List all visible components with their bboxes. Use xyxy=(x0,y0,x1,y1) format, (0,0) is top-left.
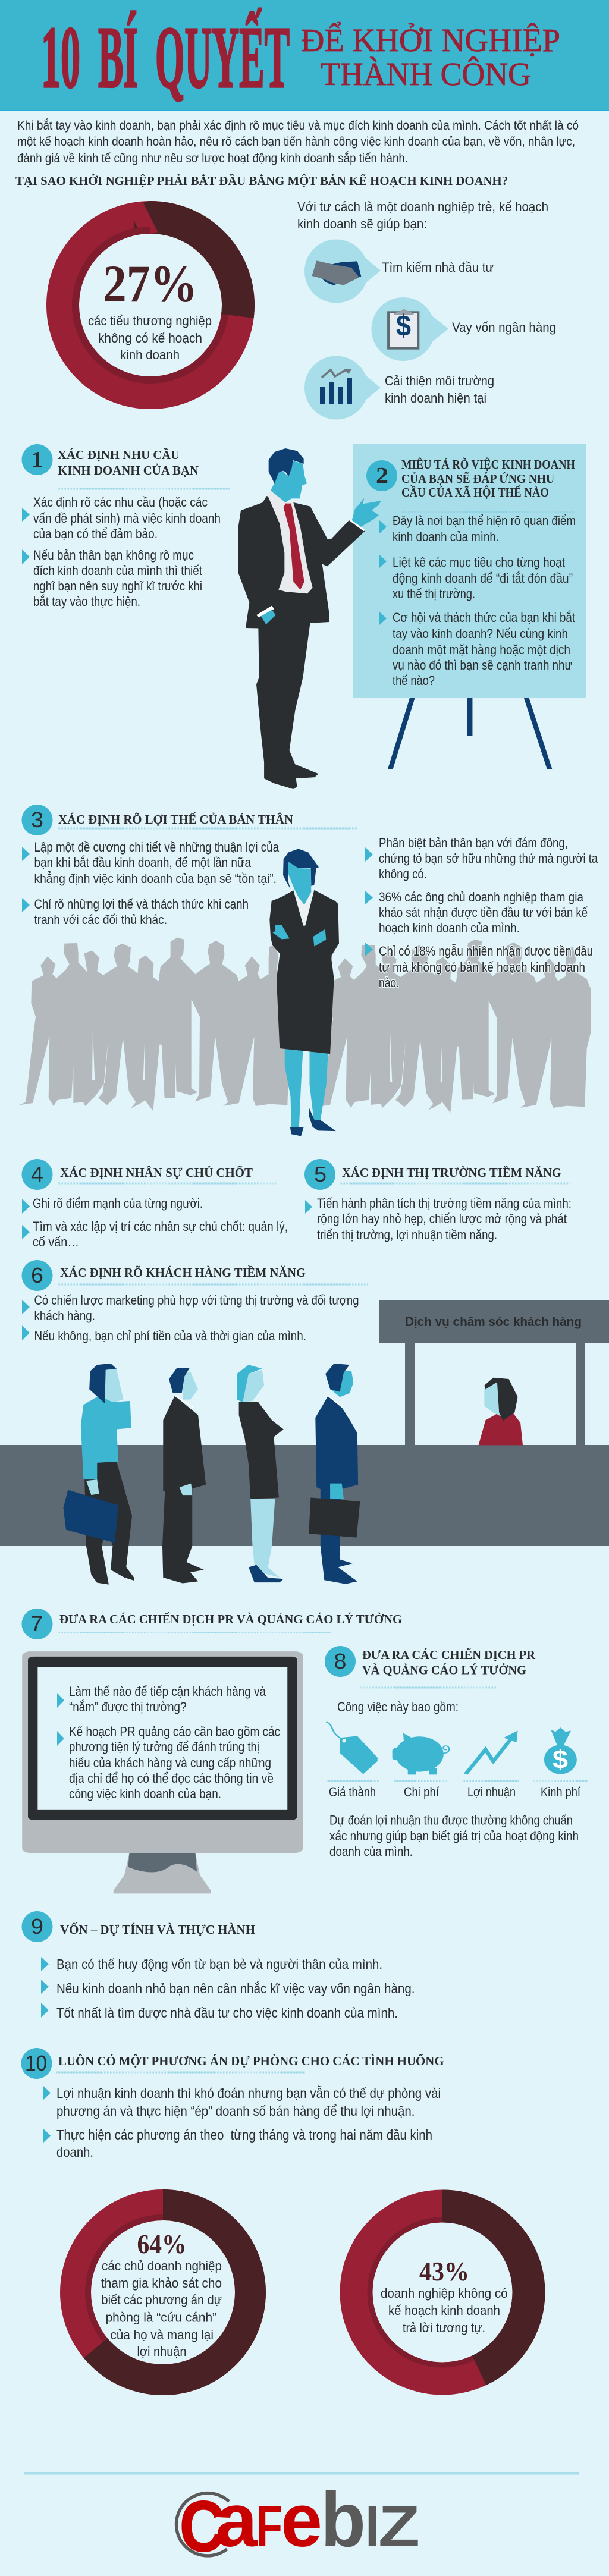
screen bullet 2: Kế hoạch PR quảng cáo cần bao gồm các xyxy=(69,1724,280,1739)
bullet text: rộng lớn hay nhỏ hẹp, chiến lược mở rộng và phát xyxy=(317,1211,567,1226)
logo red letters xyxy=(180,2478,322,2566)
bullet text 1: Phân biệt bản thân bạn với đám đông, xyxy=(379,835,568,850)
section 4 xyxy=(21,1159,288,1249)
donut caption xyxy=(88,313,212,362)
easel legs xyxy=(390,698,550,769)
heading: CỦA BẠN SẼ ĐÁP ỨNG NHU xyxy=(401,472,554,486)
bullet text 2: Chỉ rõ những lợi thế và thách thức khi cạnh xyxy=(34,897,249,912)
hair xyxy=(269,448,304,483)
bullet text 2: cố vấn… xyxy=(33,1234,79,1249)
bullet text 2: hoạch kinh doanh của mình. xyxy=(379,921,520,935)
label: Vay vốn ngân hàng xyxy=(452,320,556,335)
bullet text 1: Bạn có thể huy động vốn từ bạn bè và người thân của mình. xyxy=(56,1956,382,1972)
screen bullet 2: địa chỉ để họ có thể đọc các thông tin về xyxy=(69,1771,274,1786)
benefit: bank loan xyxy=(371,297,556,361)
icon labels: Lợi nhuận xyxy=(467,1785,516,1799)
floor xyxy=(0,1445,609,1546)
number badge 7: 7 xyxy=(30,1611,43,1636)
footer rule xyxy=(24,2472,579,2475)
bullet text 2: đích kinh doanh của mình thì thiết xyxy=(33,563,202,578)
section 5 xyxy=(304,1159,572,1242)
section 6 xyxy=(21,1260,368,1343)
donut caption: không có kế hoạch xyxy=(98,331,202,345)
heading: ĐƯA RA CÁC CHIẾN DỊCH PR xyxy=(362,1648,536,1662)
donut caption: tham gia khảo sát cho xyxy=(101,2276,222,2291)
stand xyxy=(114,1853,211,1893)
shirt xyxy=(294,889,312,926)
bullet text 1 xyxy=(379,513,576,544)
face xyxy=(288,862,311,905)
label: Cải thiện môi trường xyxy=(385,373,494,388)
speech bubble xyxy=(304,356,381,420)
header banner xyxy=(0,0,609,111)
bullet text 1: phương án và thực hiện “ép” doanh số bán hàng để thu lợi nhuận. xyxy=(56,2103,415,2119)
donut caption: kinh doanh xyxy=(120,347,180,362)
casing xyxy=(22,1651,303,1853)
crowd silhouette: right group xyxy=(316,940,591,1113)
heading: why a business plan: TẠI SAO KHỞI NGHIỆP PHẢI BẮT ĐẦU BẰNG MỘT BẢN KẾ HOẠCH KINH DOANH? xyxy=(15,174,508,188)
donut value: 43% xyxy=(419,2257,469,2286)
bullet text 3: vụ nào đó thì bạn sẽ cạnh tranh như xyxy=(393,658,572,673)
hair xyxy=(283,849,319,889)
logo red letters: a xyxy=(215,2478,258,2562)
heading xyxy=(401,457,575,500)
section 4: XÁC ĐỊNH NHÂN SỰ CHỦ CHỐT xyxy=(60,1166,253,1180)
bullet text 1 xyxy=(22,495,221,541)
heading xyxy=(362,1648,536,1677)
bullet text 2: Nếu không, bạn chỉ phí tiền của và thời gian của mình. xyxy=(34,1328,306,1343)
donut caption: phòng là “cứu cánh” xyxy=(106,2310,216,2325)
donut caption: kế hoạch kinh doanh xyxy=(388,2303,500,2318)
label: Tìm kiếm nhà đầu tư xyxy=(382,260,494,275)
section 7 heading: ĐƯA RA CÁC CHIẾN DỊCH PR VÀ QUẢNG CÁO LÝ TƯỞNG xyxy=(59,1612,402,1626)
screen bullet 2: công việc kinh doanh của bạn. xyxy=(69,1786,221,1801)
bullet text 1: vấn đề phát sinh) mà việc kinh doanh xyxy=(33,511,221,526)
donut chart: 27% xyxy=(63,218,238,392)
title: 10 bí quyết: 10 xyxy=(41,9,80,106)
benefits intro text: Với tư cách là một doanh nghiệp trẻ, kế hoạch xyxy=(297,199,548,214)
logo red letters: F xyxy=(256,2493,282,2559)
number badge 2 xyxy=(366,460,397,491)
hand xyxy=(352,498,381,527)
number badge 2: 2 xyxy=(376,463,388,488)
screen bullet 1: “nắm” được thị trường? xyxy=(69,1699,187,1714)
subtitle: ĐỂ KHỞI NGHIỆP xyxy=(301,21,560,58)
logo ring xyxy=(176,2493,229,2556)
jacket xyxy=(269,890,339,967)
shirt xyxy=(267,491,313,593)
logo red letters: C xyxy=(180,2487,225,2566)
bullet text 1: khách hàng. xyxy=(34,1308,95,1323)
logo grey letters: Z xyxy=(378,2493,420,2559)
icon labels: Giá thành xyxy=(329,1785,376,1799)
bullet text 1: kinh doanh của mình. xyxy=(393,529,499,544)
clerk xyxy=(479,1378,523,1445)
benefit: find investors xyxy=(304,239,494,303)
screen bullet 2: phương tiện lý tưởng để đánh trúng thị xyxy=(69,1739,259,1754)
donut chart: 64% xyxy=(76,2205,250,2380)
bullet text 2: bắt tay vào thực hiện. xyxy=(33,594,140,609)
donut value: 27% xyxy=(103,255,197,313)
bullet text 2: tranh với các đối thủ khác. xyxy=(34,912,167,927)
skirt xyxy=(277,941,334,1054)
bullet text 2 xyxy=(22,548,202,609)
closing paragraph: doanh của mình. xyxy=(329,1844,413,1859)
section 7 heading xyxy=(21,1609,402,1639)
bullet text 2 xyxy=(379,554,573,601)
hands xyxy=(272,925,290,939)
intro paragraph: đánh giá về kinh tế cũng như nêu sơ lược hoạt động kinh doanh sắp tiến hành. xyxy=(17,152,408,165)
donut caption: lợi nhuận xyxy=(137,2344,187,2359)
screen bullet 2: hiếu của khách hàng và cung cấp những xyxy=(69,1755,271,1770)
customer 4: man with briefcase xyxy=(309,1364,360,1584)
figure: businessman presenting xyxy=(238,448,381,789)
icon: piggy bank xyxy=(393,1733,449,1774)
bullet text 1: Lợi nhuận kinh doanh thì khó đoán nhưng bạn vẫn có thể dự phòng vài xyxy=(56,2085,441,2101)
number badge 4 xyxy=(21,1159,52,1190)
icon labels xyxy=(329,1785,580,1799)
number badge 6: 6 xyxy=(31,1263,43,1287)
section 9: VỐN – DỰ TÍNH VÀ THỰC HÀNH xyxy=(60,1922,255,1937)
donut caption: doanh nghiệp không có xyxy=(381,2286,508,2301)
bullet text 3: nào. xyxy=(379,975,399,990)
donut caption: trả lời tương tự. xyxy=(403,2320,485,2335)
section 3 right text xyxy=(365,835,598,990)
trousers xyxy=(256,616,319,789)
icon: clipboard: $ xyxy=(396,309,411,343)
bullet text 3 xyxy=(365,943,593,990)
bullet text 3 xyxy=(379,610,575,688)
bullet text 2: nghĩ bạn nên suy nghĩ kĩ trước khi xyxy=(33,579,202,593)
pocket with phone xyxy=(256,606,276,624)
number badge 3 xyxy=(21,805,52,835)
speech bubble xyxy=(371,297,448,361)
section 3 heading: XÁC ĐỊNH RÕ LỢI THẾ CỦA BẢN THÂN xyxy=(58,812,293,827)
booth xyxy=(379,1300,609,1445)
label: kinh doanh hiện tại xyxy=(385,391,486,406)
bullet text 3: doanh một mặt hàng hoặc một dịch xyxy=(393,642,570,657)
bullet text 1: bạn khi bắt đầu kinh doanh, để một lần nữa xyxy=(34,855,252,870)
bullet text 2: Thực hiện các phương án theo từng tháng và trong hai năm đầu kinh xyxy=(56,2127,432,2143)
donut chart: 43% xyxy=(356,2206,529,2379)
donut value: 64% xyxy=(137,2229,187,2259)
screen bullet 1 xyxy=(57,1684,266,1714)
number badge 5: 5 xyxy=(314,1162,327,1186)
board xyxy=(353,444,586,698)
screen bullet 2 xyxy=(57,1724,280,1801)
bullet text 2: động kinh doanh để “đi tắt đón đầu” xyxy=(393,571,573,586)
title: 10 bí quyết: BÍ xyxy=(98,9,138,106)
section 10 xyxy=(21,2048,444,2160)
number badge 9: 9 xyxy=(31,1914,43,1939)
bullet text 3: Tốt nhất là tìm được nhà đầu tư cho việc kinh doanh của mình. xyxy=(56,2005,398,2021)
face xyxy=(271,461,307,502)
bullet text 1: khẳng định việc kinh doanh của bạn sẽ “tồn tại”. xyxy=(34,871,277,886)
bullet text 3: tay vào kinh doanh? Nếu cùng kinh xyxy=(393,626,568,641)
subtitle: THÀNH CÔNG xyxy=(321,56,531,92)
icon labels: Kinh phí xyxy=(541,1785,580,1799)
crowd silhouette: left group xyxy=(19,938,293,1111)
bullet text 1: Lập một đề cương chi tiết về những thuận lợi của xyxy=(34,840,280,855)
number badge 3: 3 xyxy=(31,808,43,832)
section 10: LUÔN CÓ MỘT PHƯƠNG ÁN DỰ PHÒNG CHO CÁC TÌNH HUỐNG xyxy=(58,2054,444,2068)
benefit: improve business environment xyxy=(304,356,494,420)
customer service scene xyxy=(0,1300,609,1585)
section 9 xyxy=(21,1911,415,2021)
bullet text 1 xyxy=(22,1293,359,1323)
bullet text 1 xyxy=(365,835,598,881)
shoes xyxy=(290,1127,304,1136)
logo red letters: e xyxy=(281,2478,322,2562)
header banner: QUYẾT xyxy=(155,8,290,106)
number badge 1 xyxy=(21,444,52,475)
heading: MIÊU TẢ RÕ VIỆC KINH DOANH xyxy=(401,457,575,472)
bullet text 3: thế nào? xyxy=(393,673,435,688)
money bag dollar sign: $ xyxy=(553,1745,568,1774)
donut caption: của họ và mang lại xyxy=(111,2327,214,2342)
section 1 xyxy=(21,444,230,609)
benefits intro text xyxy=(297,199,548,231)
legs xyxy=(285,1048,303,1127)
speech bubble xyxy=(304,239,381,303)
title: 10 bí quyết xyxy=(41,8,290,106)
donut caption: các chủ doanh nghiệp xyxy=(102,2258,222,2273)
bullet text 2 xyxy=(43,2127,432,2160)
section 5: XÁC ĐỊNH THỊ TRƯỜNG TIỀM NĂNG xyxy=(342,1166,561,1180)
number badge 1: 1 xyxy=(32,447,43,472)
bullet text 2 xyxy=(22,897,249,927)
bullet text xyxy=(305,1196,572,1242)
icon: bar chart xyxy=(320,369,352,404)
bullet text 2 xyxy=(22,1219,288,1249)
bullet text 1: không có. xyxy=(379,866,427,881)
screen bullet 1: Làm thế nào để tiếp cận khách hàng và xyxy=(69,1684,266,1699)
bullet text 1: Xác định rõ các nhu cầu (hoặc các xyxy=(33,495,208,510)
number badge 10: 10 xyxy=(25,2051,47,2075)
heading: VÀ QUẢNG CÁO LÝ TƯỞNG xyxy=(362,1663,526,1677)
jacket xyxy=(238,496,365,629)
icon: handshake xyxy=(312,260,361,285)
screen xyxy=(37,1667,287,1810)
heading: CẦU CỦA XÃ HỘI THẾ NÀO xyxy=(401,485,549,500)
heading: XÁC ĐỊNH NHU CẦU xyxy=(58,448,180,462)
closing paragraph xyxy=(329,1812,579,1859)
bullet text 1: Đây là nơi bạn thể hiện rõ quan điểm xyxy=(393,513,576,528)
number badge 6 xyxy=(21,1260,52,1291)
section 3 left text xyxy=(22,840,280,927)
subtitle xyxy=(301,21,560,92)
label xyxy=(385,373,494,406)
booth sign text: Dịch vụ chăm sóc khách hàng xyxy=(405,1314,582,1329)
heading: KINH DOANH CỦA BẠN xyxy=(58,463,199,477)
logo grey letters: I xyxy=(365,2493,379,2559)
section 8 xyxy=(325,1646,588,1859)
section 6: XÁC ĐỊNH RÕ KHÁCH HÀNG TIỀM NĂNG xyxy=(60,1265,306,1280)
customer 2: man with glasses xyxy=(162,1368,206,1583)
number badge 4: 4 xyxy=(31,1162,43,1186)
icon: price tag xyxy=(327,1722,378,1774)
bullet text 2: Nếu kinh doanh nhỏ bạn nên cân nhắc kĩ việc vay vốn ngân hàng. xyxy=(56,1981,415,1996)
bullet text: triển thị trường, lợi nhuận tiềm năng. xyxy=(317,1227,497,1242)
bullet text 1 xyxy=(43,2085,441,2119)
bullet text 1: Ghi rõ điểm mạnh của từng người. xyxy=(33,1196,203,1211)
icon: money bag xyxy=(544,1727,577,1774)
bullet text 2: xu thế thị trường. xyxy=(393,586,475,601)
bullet text 2: Liệt kê các mục tiêu cho từng hoạt xyxy=(393,555,565,570)
bullet text 1 xyxy=(22,1196,203,1214)
cuff xyxy=(349,519,365,531)
panel: easel board, section 2 xyxy=(353,444,586,769)
bullet text: Tiến hành phân tích thị trường tiềm năng của mình: xyxy=(317,1196,572,1211)
bullet text 2: Nếu bản thân bạn không rõ mục xyxy=(33,548,194,563)
customer 3: woman in dress xyxy=(237,1365,284,1582)
logo grey letters: b xyxy=(321,2476,366,2563)
number badge 10 xyxy=(21,2048,52,2079)
donut caption: biết các phương án dự xyxy=(101,2292,222,2307)
benefits intro text: kinh doanh sẽ giúp bạn: xyxy=(297,216,427,231)
number badge 8: 8 xyxy=(334,1649,346,1673)
bullet text 2 xyxy=(365,890,588,935)
number badge 7 xyxy=(21,1609,52,1639)
bullet text 1: của bạn có thể đảm bảo. xyxy=(33,526,158,541)
bullet text 1 xyxy=(22,840,280,886)
monitor xyxy=(22,1651,303,1893)
bullet text 2: Tìm và xác lập vị trí các nhân sự chủ chốt: quản lý, xyxy=(33,1219,288,1234)
bullet text 2: doanh. xyxy=(56,2144,93,2160)
donut caption xyxy=(101,2258,222,2359)
donut caption: các tiểu thương nghiệp xyxy=(88,313,212,328)
number badge 8 xyxy=(325,1646,356,1677)
heading xyxy=(58,448,199,477)
number badge 5 xyxy=(304,1159,335,1190)
tie xyxy=(284,504,304,590)
bullet text 3: Cơ hội và thách thức của bạn khi bắt xyxy=(393,610,575,625)
number badge 9 xyxy=(21,1911,52,1942)
bullet text 2: 36% các ông chủ doanh nghiệp tham gia xyxy=(379,890,584,904)
logo: CafeBiz xyxy=(176,2476,420,2566)
donut caption xyxy=(381,2286,508,2335)
section 3 heading xyxy=(21,805,293,835)
intro paragraph xyxy=(17,119,579,165)
icon: clipboard xyxy=(387,309,419,350)
bullet text 1: Có chiến lược marketing phù hợp với từng thị trường và đối tượng xyxy=(34,1293,359,1308)
intro text: Công việc này bao gồm: xyxy=(337,1699,459,1714)
icon labels: Chi phí xyxy=(404,1785,439,1799)
customer 1: woman with bag xyxy=(63,1364,134,1585)
icon: rising arrow xyxy=(466,1730,518,1774)
figure: businesswoman xyxy=(269,849,339,1136)
logo grey letters xyxy=(321,2476,420,2563)
